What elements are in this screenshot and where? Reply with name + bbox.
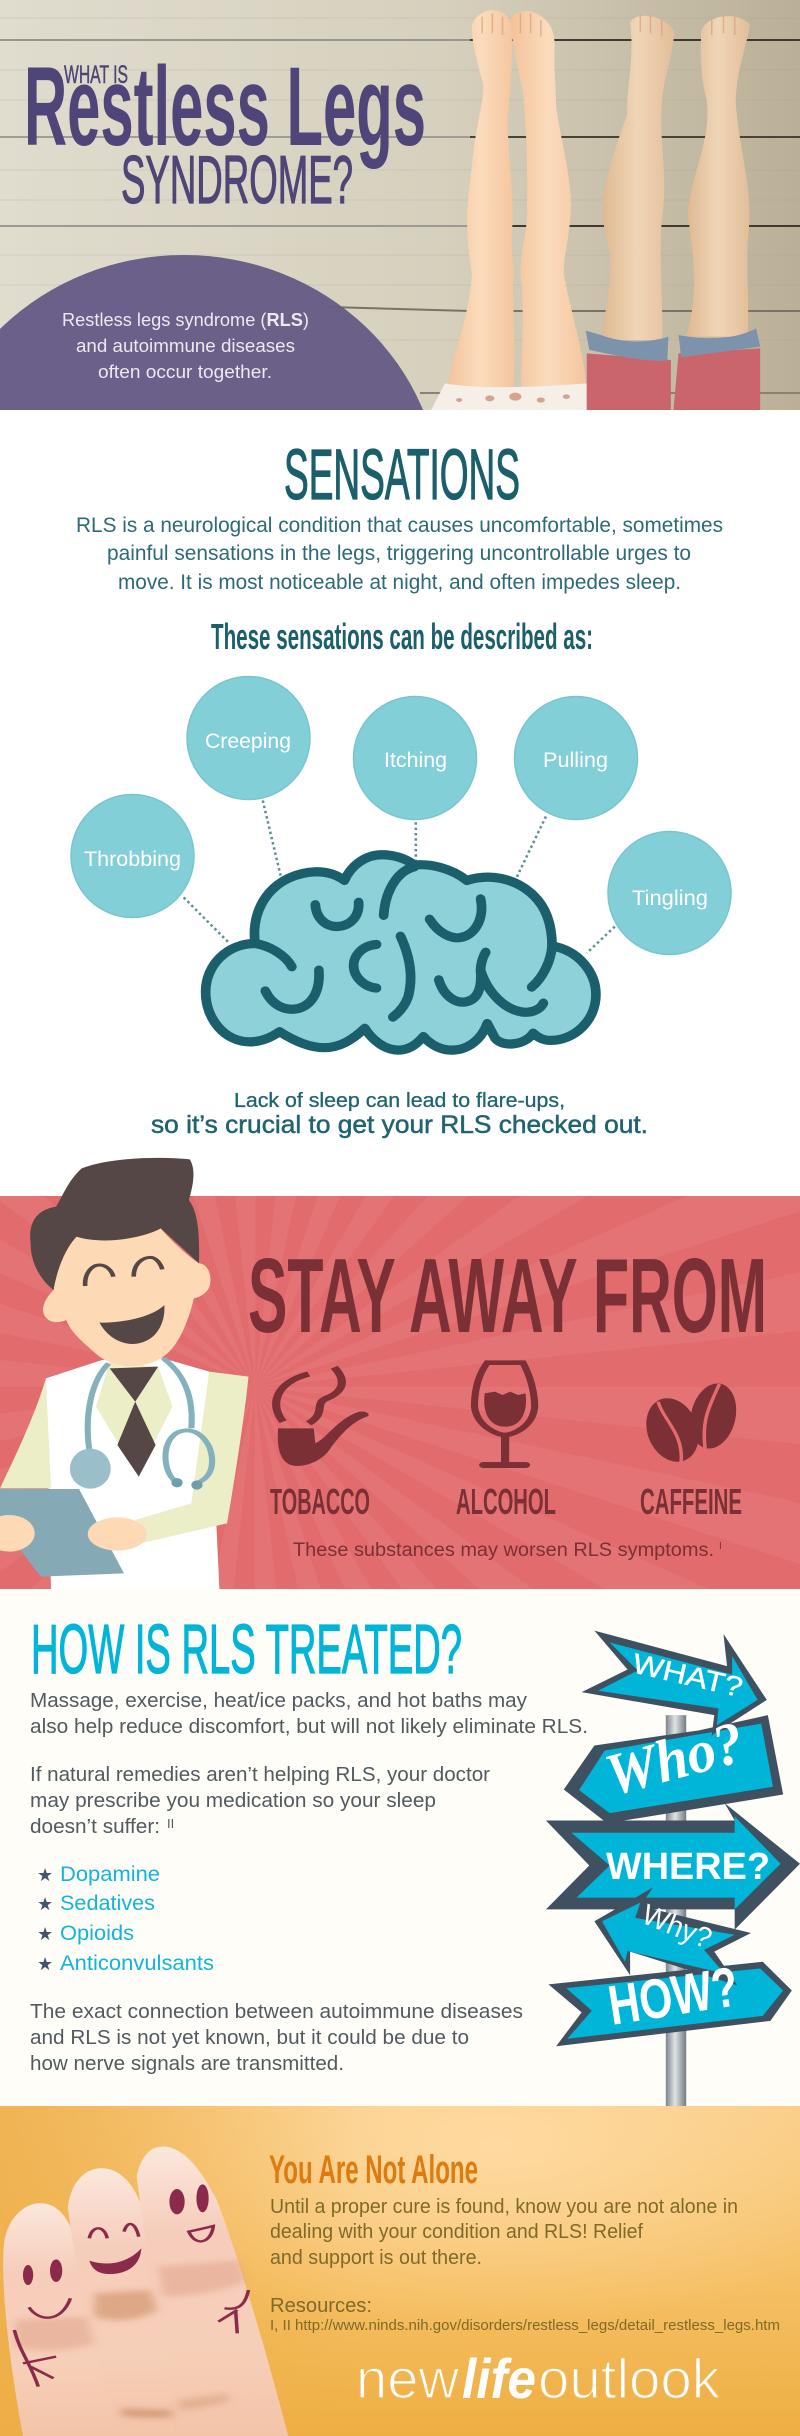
circle: Creeping: Creeping	[205, 730, 291, 753]
icon: wine glass	[474, 1363, 535, 1465]
illustration: signpost	[546, 1631, 800, 2107]
heading: you are not alone: You Are Not Alone	[269, 2148, 478, 2192]
purple ellipse callout	[0, 255, 423, 410]
photo: legs	[431, 10, 760, 410]
circle: Tingling: Tingling	[632, 887, 708, 910]
illustration: signpost: Why?	[637, 1899, 716, 1955]
illustration: signpost: WHAT?	[630, 1648, 746, 1703]
purple ellipse callout: Restless legs syndrome (RLS)	[62, 310, 309, 330]
panel: hero	[0, 0, 800, 410]
text: reassurance	[270, 2196, 738, 2269]
panel: sensations	[0, 410, 800, 1196]
text: connection	[30, 2001, 523, 2075]
purple ellipse callout: often occur together.	[98, 362, 272, 382]
circle: Throbbing: Throbbing	[84, 848, 181, 871]
circle: Itching	[354, 696, 476, 820]
logo: newlifeoutlook: new	[356, 2347, 460, 2410]
text: connection: and RLS is not yet known, but it could be due to	[30, 2027, 469, 2049]
text: connection: how nerve signals are transmitted.	[30, 2053, 344, 2075]
illustration: signpost: WHERE?	[606, 1846, 770, 1888]
resources: I, II http://www.ninds.nih.gov/disorders/restless_legs/detail_restless_legs.htm	[270, 2317, 780, 2334]
wood background	[0, 0, 800, 410]
text: reassurance: dealing with your condition and RLS! Relief	[270, 2221, 643, 2243]
icon: tobacco pipe	[276, 1367, 369, 1466]
title: Restless Legs	[24, 44, 426, 169]
closing message: so it’s crucial to get your RLS checked out.	[151, 1111, 648, 1139]
list: medications: ★	[37, 1865, 53, 1886]
heading: sensations: SENSATIONS	[284, 436, 520, 515]
label: alcohol: ALCOHOL	[456, 1481, 556, 1522]
closing message: Lack of sleep can lead to flare-ups,	[234, 1090, 565, 1112]
label: tobacco: TOBACCO	[270, 1481, 370, 1522]
note: I	[719, 1541, 722, 1552]
icon: coffee beans	[640, 1382, 741, 1464]
text: remedies	[30, 1690, 588, 1838]
resources	[270, 2295, 780, 2334]
illustration: signpost: Who?	[598, 1709, 751, 1809]
illustration: signpost: HOW?	[604, 1954, 742, 2037]
photo: smiling fingers	[3, 2147, 288, 2436]
resources: Resources:	[270, 2295, 372, 2317]
text: remedies: doesn’t suffer:	[30, 1816, 160, 1838]
logo: newlifeoutlook: outlook	[538, 2347, 721, 2410]
list: medications: ★	[37, 1924, 53, 1945]
text: reassurance: and support is out there.	[270, 2247, 482, 2269]
closing message	[151, 1090, 648, 1139]
logo: newlifeoutlook: life	[462, 2347, 536, 2410]
title	[28, 64, 424, 204]
text: reassurance: Until a proper cure is found, know you are not alone in	[270, 2196, 738, 2218]
circle: Throbbing	[71, 794, 194, 918]
icon: brain	[206, 855, 596, 1050]
text: remedies: Massage, exercise, heat/ice packs, and hot baths may	[30, 1690, 527, 1712]
intro text: painful sensations in the legs, triggering uncontrollable urges to	[107, 542, 691, 565]
logo: newlifeoutlook	[356, 2347, 721, 2410]
purple ellipse callout: and autoimmune diseases	[76, 336, 295, 356]
text: remedies: If natural remedies aren’t helping RLS, your doctor	[30, 1764, 490, 1786]
list: medications: Anticonvulsants	[60, 1952, 214, 1975]
note: These substances may worsen RLS symptoms.	[293, 1540, 714, 1561]
panel: how is RLS treated	[0, 1589, 800, 2107]
list: medications: Sedatives	[60, 1892, 155, 1915]
panel: stay away from	[0, 1158, 800, 1589]
illustration: doctor	[0, 1158, 248, 1589]
heading: treated: HOW IS RLS TREATED?	[31, 1610, 462, 1688]
circle: Pulling: Pulling	[543, 749, 608, 772]
circle: Itching: Itching	[384, 749, 447, 772]
title: WHAT IS	[64, 61, 128, 89]
intro text	[76, 514, 723, 594]
circle: Tingling	[608, 832, 731, 954]
list: medications: Opioids	[60, 1922, 134, 1945]
dotted connectors	[184, 800, 615, 953]
text: remedies: may prescribe you medication so your sleep	[30, 1790, 436, 1812]
intro text: move. It is most noticeable at night, and often impedes sleep.	[118, 571, 681, 594]
text: connection: The exact connection between autoimmune diseases	[30, 2001, 523, 2023]
list: medications	[37, 1863, 214, 1975]
panel: you are not alone	[0, 2106, 800, 2436]
title: SYNDROME?	[121, 142, 353, 218]
intro text: RLS is a neurological condition that causes uncomfortable, sometimes	[76, 514, 723, 537]
text: remedies: also help reduce discomfort, but will not likely eliminate RLS.	[30, 1716, 588, 1738]
circle: Creeping	[187, 676, 310, 800]
text: remedies: II	[167, 1816, 174, 1831]
list: medications: ★	[37, 1954, 53, 1975]
circle: Pulling	[514, 696, 638, 820]
list: medications: Dopamine	[60, 1863, 160, 1886]
list: medications: ★	[37, 1894, 53, 1915]
